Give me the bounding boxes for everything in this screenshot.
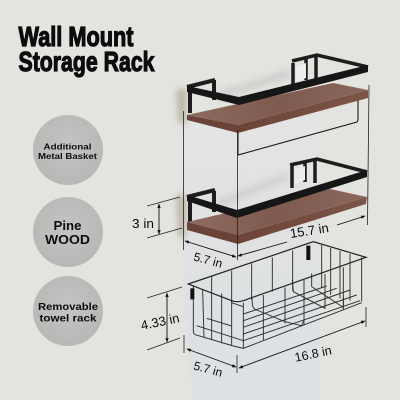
front wires	[193, 267, 362, 348]
back bracket	[290, 159, 367, 188]
back bracket	[292, 55, 368, 86]
front rail	[187, 65, 368, 105]
wire basket	[188, 242, 366, 348]
badge: pine wood	[33, 197, 103, 267]
hanging clips	[192, 246, 308, 299]
dimension: 4.33 in	[139, 293, 181, 342]
badge: removable towel rack: towel rack	[40, 314, 97, 324]
wood plank	[187, 189, 367, 235]
wall light band	[184, 95, 320, 400]
dimension: 4.33 in: 4.33 in	[139, 310, 181, 333]
wood plank	[187, 83, 368, 125]
badge: removable towel rack: Removable	[38, 302, 98, 313]
dimension: 5.7 in upper: 5.7 in	[192, 250, 224, 271]
badge: additional metal basket: Metal Basket	[38, 151, 97, 161]
title: Wall Mount	[18, 21, 134, 52]
wall shadows	[176, 68, 290, 238]
icon: towel bar	[238, 100, 358, 155]
top shelf with rail and towel bar	[187, 55, 368, 155]
floor wires	[197, 286, 360, 341]
dimension: 16.8 in: 16.8 in	[293, 343, 333, 365]
dimension: 15.7 in	[238, 216, 365, 256]
dimension guide lines	[147, 85, 369, 373]
badge: additional metal basket	[33, 115, 103, 185]
dimension: 5.7 in upper	[185, 241, 236, 271]
title: Storage Rack	[18, 46, 155, 77]
left bracket	[187, 80, 215, 113]
front rail	[187, 170, 367, 218]
dimension: 16.8 in	[239, 321, 365, 368]
badge: pine wood: WOOD	[45, 232, 90, 247]
dimension: 15.7 in: 15.7 in	[289, 220, 330, 241]
u-shaped short wires	[232, 273, 343, 326]
badge: removable towel rack	[33, 276, 103, 346]
left bracket	[187, 190, 215, 222]
basket rim	[188, 242, 366, 302]
dimension: 5.7 in lower	[187, 349, 236, 380]
badge: additional metal basket: Additional	[44, 142, 92, 152]
badge: pine wood: Pine	[54, 218, 82, 233]
middle shelf with rail	[187, 159, 367, 244]
title	[18, 21, 155, 77]
dimension: 3 in: 3 in	[132, 217, 154, 231]
dimension: 3 in	[132, 204, 159, 234]
dimension: 5.7 in lower: 5.7 in	[192, 359, 224, 380]
back wires	[252, 245, 362, 302]
